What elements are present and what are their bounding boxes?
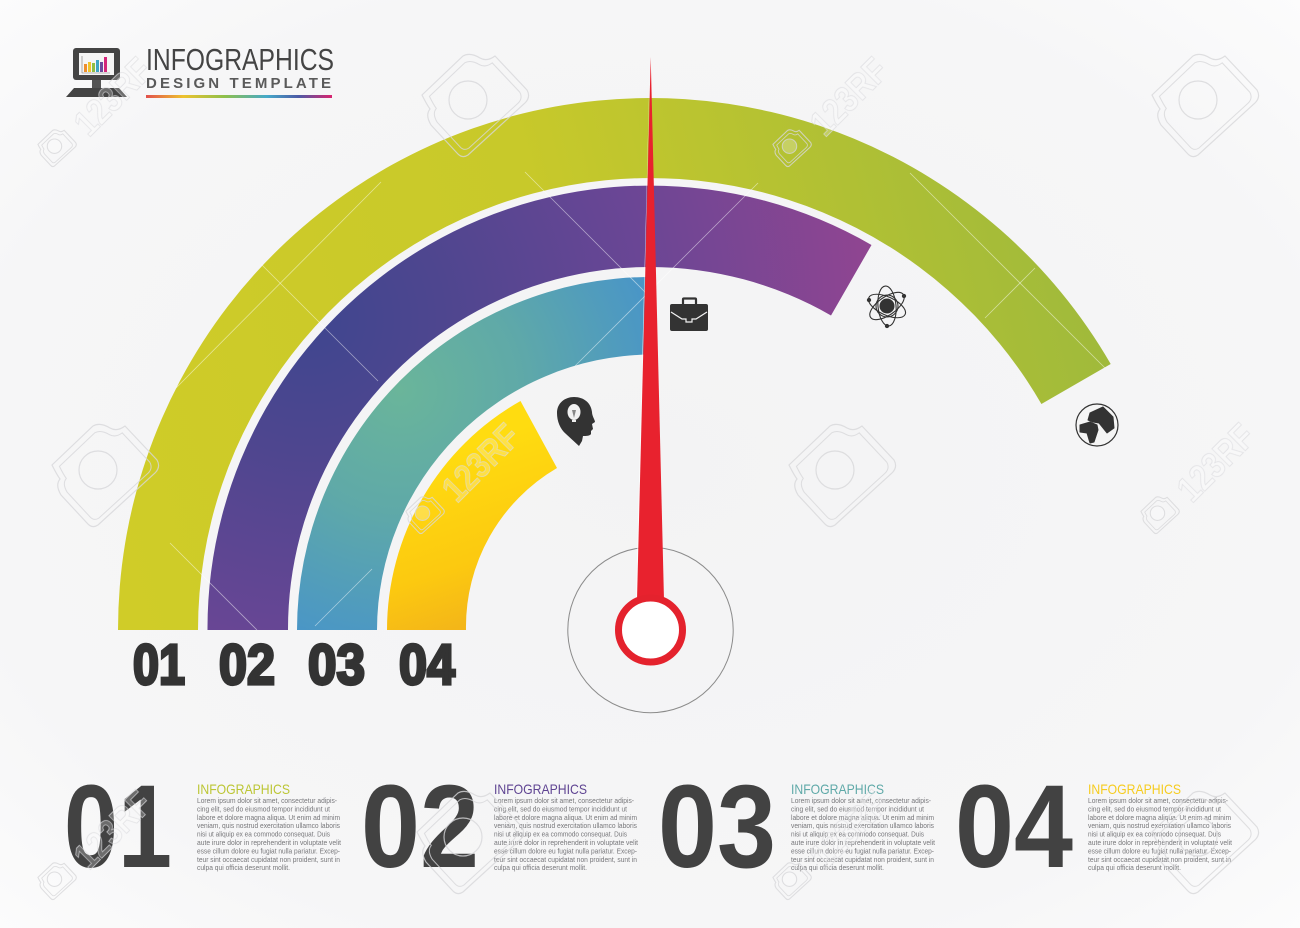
semicircular gauge bands [118,98,1111,630]
subtitle: DESIGN TEMPLATE [146,75,331,92]
body text [494,796,638,872]
body text: nisi ut aliquip ex ea commodo consequat. Duis [1088,830,1221,839]
watermark: 123RF [802,50,896,144]
body text: Lorem ipsum dolor sit amet, consectetur adipis- [494,796,634,805]
body text [791,796,935,872]
body text: veniam, quis nostrud exercitation ullamco laboris [494,821,637,830]
body text: teur sint occaecat cupidatat non proident, sunt in [197,855,340,864]
info block 04 [955,761,1232,893]
outer thin circle [568,547,733,713]
big number 02: 02 [361,761,479,893]
body text: nisi ut aliquip ex ea commodo consequat. Duis [197,830,330,839]
body text: aute irure dolor in reprehenderit in voluptate velit [494,838,638,847]
body text: veniam, quis nostrud exercitation ullamco laboris [197,821,340,830]
big number 04: 04 [955,761,1073,893]
gauge needle [568,57,733,713]
heading: INFOGRAPHICS [494,781,587,797]
icon: atom [865,285,909,328]
body text: nisi ut aliquip ex ea commodo consequat. Duis [494,830,627,839]
needle pointer [637,57,664,600]
number 03: 03 [308,633,365,697]
number 04: 04 [399,633,455,697]
body text: cing elit, sed do eiusmod tempor incididunt ut [1088,804,1221,813]
body text: labore et dolore magna aliqua. Ut enim ad minim [494,813,637,822]
body text: culpa qui officia deserunt mollit. [197,863,290,872]
info block 03 [658,761,935,893]
needle hub [618,598,682,662]
watermark: 123RF [434,416,528,510]
big number 03: 03 [658,761,776,893]
body text: culpa qui officia deserunt mollit. [791,863,884,872]
body text: labore et dolore magna aliqua. Ut enim ad minim [791,813,934,822]
icon: computer monitor [66,48,127,97]
body text: cing elit, sed do eiusmod tempor incididunt ut [197,804,330,813]
body text: esse cillum dolore eu fugiat nulla pariatur. Excep- [1088,846,1231,855]
body text: labore et dolore magna aliqua. Ut enim ad minim [1088,813,1231,822]
body text: culpa qui officia deserunt mollit. [494,863,587,872]
band 04 [387,401,557,630]
body text: Lorem ipsum dolor sit amet, consectetur adipis- [197,796,337,805]
body text: nisi ut aliquip ex ea commodo consequat. Duis [791,830,924,839]
watermark: 123RF [802,783,896,877]
heading: INFOGRAPHICS [197,781,290,797]
body text: Lorem ipsum dolor sit amet, consectetur adipis- [1088,796,1228,805]
band 02 [207,186,872,630]
body text: teur sint occaecat cupidatat non proident, sunt in [494,855,637,864]
body text: aute irure dolor in reprehenderit in voluptate velit [197,838,341,847]
body text: culpa qui officia deserunt mollit. [1088,863,1181,872]
band 03 [297,277,650,630]
body text: labore et dolore magna aliqua. Ut enim ad minim [197,813,340,822]
body text: teur sint occaecat cupidatat non proident, sunt in [791,855,934,864]
body text: Lorem ipsum dolor sit amet, consectetur adipis- [791,796,931,805]
watermark: 123RF [66,783,160,877]
body text: esse cillum dolore eu fugiat nulla pariatur. Excep- [791,846,934,855]
watermark: 123RF [1169,416,1263,510]
body text [197,796,341,872]
body text [1088,796,1232,872]
body text: veniam, quis nostrud exercitation ullamco laboris [791,821,934,830]
icon: briefcase [670,298,708,331]
watermark: 123RF [66,50,160,144]
heading: INFOGRAPHICS [791,781,884,797]
heading: INFOGRAPHICS [1088,781,1181,797]
big number 01: 01 [64,761,172,893]
title: INFOGRAPHICS [146,42,334,77]
icon: globe [1076,404,1118,446]
body text: aute irure dolor in reprehenderit in voluptate velit [791,838,935,847]
info block 01 [64,761,341,893]
number 02: 02 [219,633,275,697]
band numbers [133,633,455,697]
body text: aute irure dolor in reprehenderit in voluptate velit [1088,838,1232,847]
body text: cing elit, sed do eiusmod tempor incididunt ut [791,804,924,813]
number 01: 01 [133,633,185,697]
body text: esse cillum dolore eu fugiat nulla pariatur. Excep- [494,846,637,855]
band 01 [118,98,1111,630]
logo header [66,42,334,98]
body text: teur sint occaecat cupidatat non proident, sunt in [1088,855,1231,864]
info block 02 [361,761,638,893]
body text: esse cillum dolore eu fugiat nulla pariatur. Excep- [197,846,340,855]
body text: cing elit, sed do eiusmod tempor incididunt ut [494,804,627,813]
body text: veniam, quis nostrud exercitation ullamco laboris [1088,821,1231,830]
rainbow underline [146,95,332,98]
icon: head with light bulb [557,397,595,446]
